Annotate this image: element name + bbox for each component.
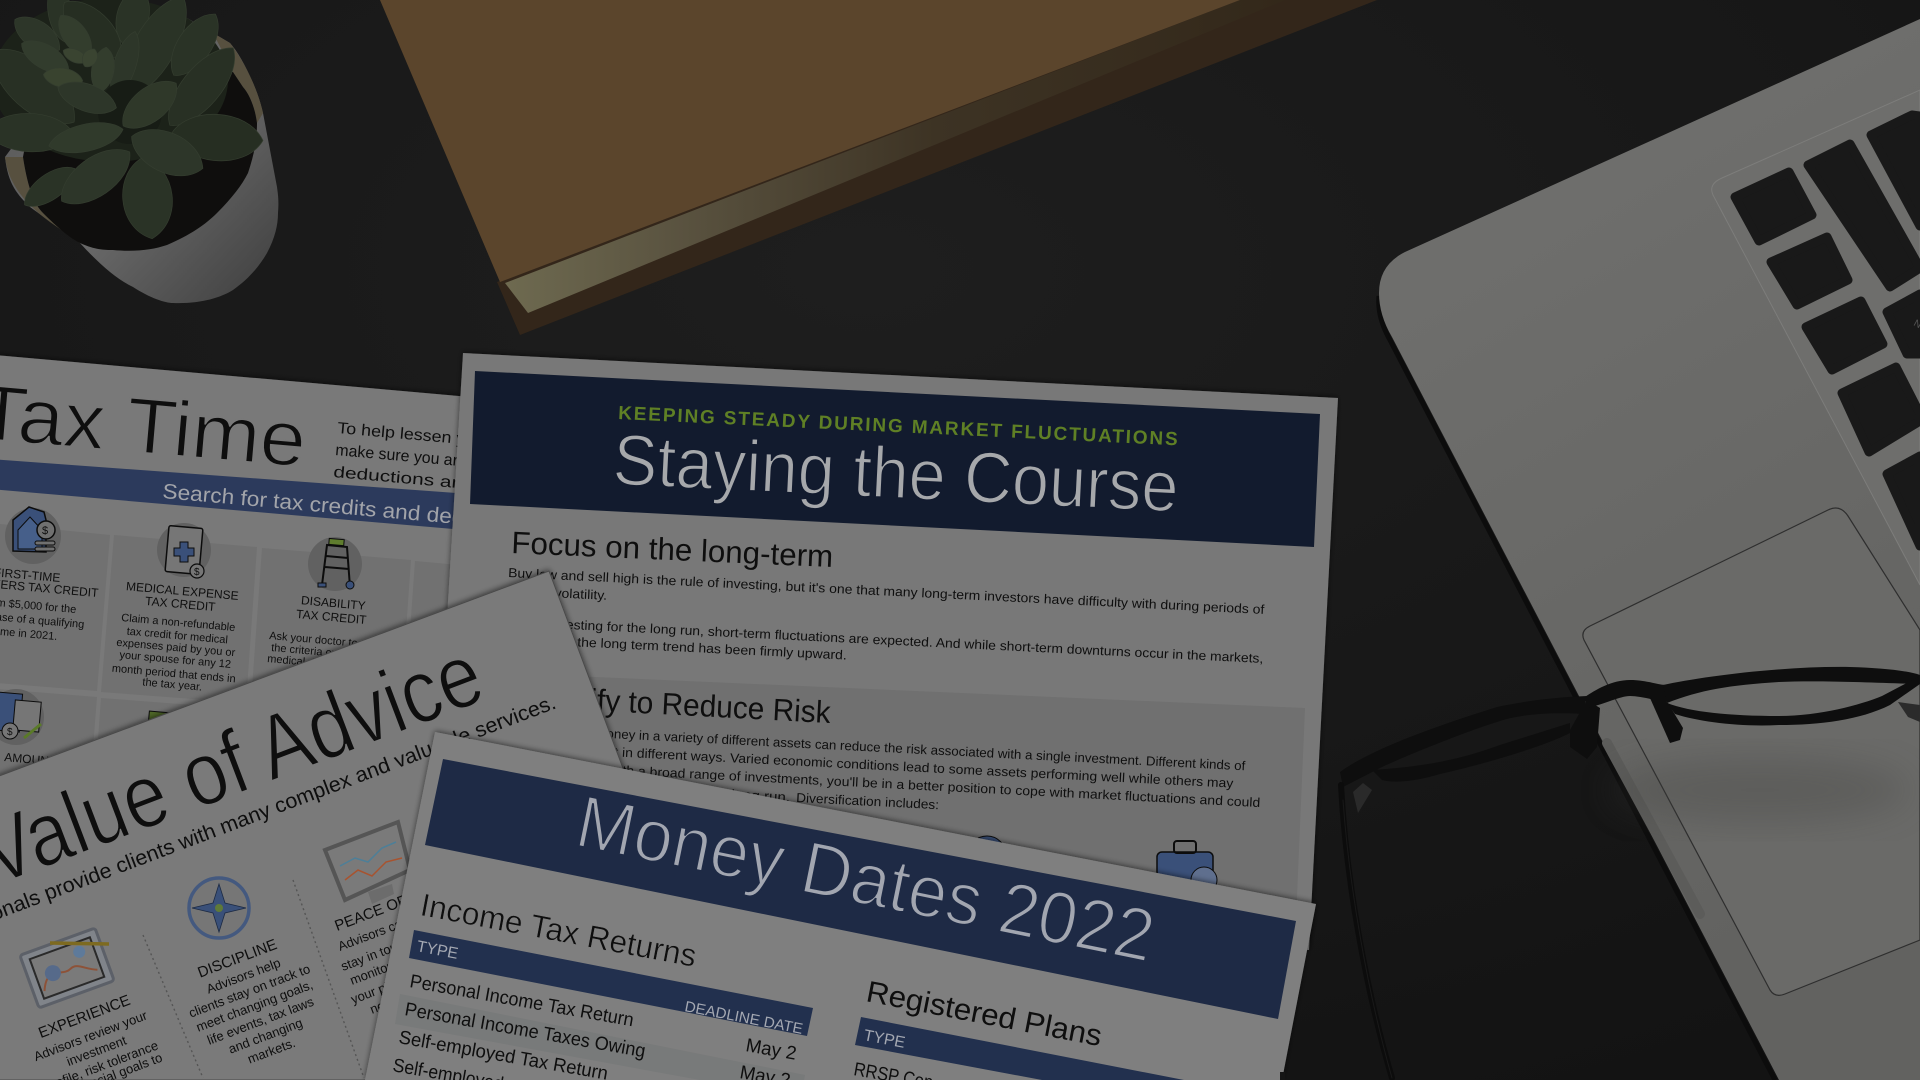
disability card text: the criteria on the [271, 642, 356, 661]
medical expense card text: TAX CREDIT [145, 594, 217, 614]
right lens upper rim [1663, 667, 1920, 703]
section: diversify to reduce risk [505, 678, 1261, 812]
icon: walker [308, 537, 362, 591]
intro text [333, 420, 552, 500]
discipline column text: DISCIPLINE [195, 936, 279, 981]
money sheet paper [365, 732, 1316, 1080]
eyeglasses [1340, 667, 1920, 1078]
medical expense card text: month period that ends in [111, 663, 236, 685]
medical expense card text: Claim a non-refundable [121, 612, 236, 634]
gray diversify panel [470, 672, 1305, 920]
pot body [5, 15, 278, 303]
left lens upper rim [1340, 696, 1587, 787]
income table columns [415, 938, 804, 1038]
income table columns: DEADLINE DATE [683, 998, 804, 1038]
right nose pad [1650, 698, 1683, 743]
section: diversify to reduce risk: investments react in different ways. Varied economic conditions lead to some assets performing well while others may [509, 739, 1234, 791]
column dividers [143, 880, 364, 1078]
section: diversify to reduce risk: Diversification includes: [796, 790, 939, 812]
temple arm [1341, 785, 1392, 1078]
book [380, 0, 1377, 335]
medical expense card text: tax credit for medical [126, 626, 228, 646]
income tax returns heading: Income Tax Returns [418, 887, 700, 974]
section: focus on the long-term: Buy low and sell high is the rule of investing, but it's one that many long-term investors have difficulty with during periods of [508, 565, 1265, 617]
icon: calculator and form: $ [7, 727, 13, 738]
sheet: Tax Time [0, 351, 552, 860]
disability card text: TAX CREDIT [296, 607, 368, 627]
icon: tablet with charts [20, 928, 114, 1008]
sheet: The Value of Advice [0, 571, 740, 1080]
tax sheet paper [0, 351, 470, 800]
book back cover [497, 0, 1377, 335]
icon: green cash peek [149, 711, 175, 723]
panels [0, 520, 470, 860]
disability card text: DISABILITY [301, 593, 366, 613]
intro text: make sure you are claiming all [335, 442, 550, 478]
experience column text: Advisors review your [32, 1007, 150, 1064]
navy header band [470, 371, 1320, 547]
soil [23, 40, 257, 251]
left nose pad [1570, 700, 1600, 759]
icon: gear [968, 836, 1006, 874]
disability card text: Ask your doctor to review [269, 630, 393, 653]
subtitle: KEEPING STEADY DURING MARKET FLUCTUATIONS [618, 403, 1178, 450]
discipline column text: clients stay on track to [187, 961, 312, 1021]
discipline column text: markets. [245, 1035, 297, 1067]
registered table header [855, 1017, 1184, 1080]
registered table column: TYPE [862, 1027, 907, 1052]
keyboard well [1712, 90, 1920, 585]
icon: calculator and form [0, 689, 44, 745]
section: diversify to reduce risk: improve your long run. [640, 782, 790, 805]
section: focus on the long-term [508, 525, 1265, 666]
income table rows: May 2 [744, 1035, 798, 1065]
icon: medical document: $ [194, 567, 200, 578]
title: Staying the Course [611, 420, 1180, 528]
medical expense card text [111, 579, 239, 694]
title: Money Dates 2022 [570, 779, 1162, 978]
medical expense card text: the tax year. [142, 676, 203, 694]
keyboard keys [1735, 115, 1920, 546]
peace of mind column text: PEACE OF MIND [332, 877, 449, 935]
book pages [505, 0, 1285, 313]
intro text: deductions and credits. [333, 464, 548, 500]
medical expense card text: your spouse for any 12 [119, 649, 232, 671]
intro text: To help lessen your tax bill, [337, 420, 552, 456]
section: diversify to reduce risk: Investing your money in a variety of different assets can reduce the risk associated with a single investment. Different kinds of [509, 721, 1246, 773]
discipline column text: and changing [226, 1015, 305, 1057]
blue search bar [0, 459, 470, 530]
peace of mind column text: Advisors can help you [336, 895, 460, 954]
icon: monitor with line chart [325, 822, 410, 904]
icon: house with coins: $ [42, 525, 48, 537]
experience column text [32, 992, 164, 1080]
book front cover [380, 0, 1240, 282]
income table columns: TYPE [415, 938, 460, 963]
medical expense card text: expenses paid by you or [116, 637, 236, 659]
discipline column text: life events, tax laws [205, 994, 316, 1048]
succulent leaves [0, 0, 265, 241]
peace of mind column text [332, 877, 460, 1017]
section: diversify to reduce risk: perform poorly. With a broad range of investments, you'll be in a better position to cope with market fluctuations and could [509, 757, 1261, 810]
pencil [50, 943, 109, 944]
income table rows: Personal Income Tax Return [408, 971, 635, 1031]
section: focus on the long-term: Focus on the long-term [511, 525, 834, 574]
left lens lower rim [1372, 723, 1570, 782]
shaded row [395, 994, 805, 1080]
trackpad [1583, 508, 1920, 995]
navy header band [425, 759, 1296, 1019]
hinges [1353, 783, 1372, 813]
section: focus on the long-term: historically the long term trend has been firmly upward. [508, 631, 847, 663]
experience column text: EXPERIENCE [36, 992, 133, 1042]
peace of mind column text: needs. [368, 989, 410, 1017]
bridge [1585, 680, 1667, 708]
small dark mark [1280, 1072, 1285, 1080]
experience column text: investment [64, 1033, 129, 1069]
glasses shadow [1610, 758, 1910, 822]
registered plans heading: Registered Plans [864, 975, 1105, 1053]
laptop notch [1607, 743, 1700, 914]
icon: house with coins [5, 507, 61, 564]
income table header [409, 930, 813, 1036]
medical expense card text: MEDICAL EXPENSE [125, 579, 239, 603]
plant in white pot [0, 0, 278, 303]
amount card heading: AMOUNT [4, 750, 57, 769]
laptop underside rim [1379, 296, 1775, 1080]
right lens lower rim [1667, 676, 1920, 725]
disability card text [267, 593, 393, 674]
peace of mind column text: stay in touch and [339, 925, 436, 974]
section: focus on the long-term: market volatility. [508, 583, 607, 603]
icon: compass [189, 878, 249, 938]
laptop body [1379, 19, 1920, 1080]
icon: briefcase with globe [1157, 841, 1217, 893]
pot inner rim [5, 33, 263, 243]
sheet: Money Dates 2022 [365, 732, 1316, 1080]
search bar text: Search for tax credits and deductions [162, 480, 537, 536]
advice sheet paper [0, 571, 740, 1080]
section: focus on the long-term: When investing for the long run, short-term fluctuations are expected. And while short-term downturns occur in the markets, [508, 614, 1264, 666]
income table rows [391, 971, 798, 1080]
staying sheet paper [430, 353, 1338, 950]
icon: medical document [157, 523, 211, 578]
disability card text: medical disability form [267, 653, 376, 674]
discipline column text: Advisors help [204, 955, 283, 997]
laptop [1379, 19, 1920, 1080]
discipline column text [187, 936, 316, 1067]
section: diversify to reduce risk: Diversify to Reduce Risk [505, 678, 832, 730]
discipline column text: meet changing goals, [194, 977, 315, 1035]
income table rows: Personal Income Taxes Owing [403, 999, 647, 1062]
peace of mind column text: monitor [348, 958, 394, 988]
peace of mind column text: your plan [349, 974, 404, 1007]
sheet: Staying the Course [430, 353, 1338, 950]
first-time buyers card text [0, 565, 100, 643]
